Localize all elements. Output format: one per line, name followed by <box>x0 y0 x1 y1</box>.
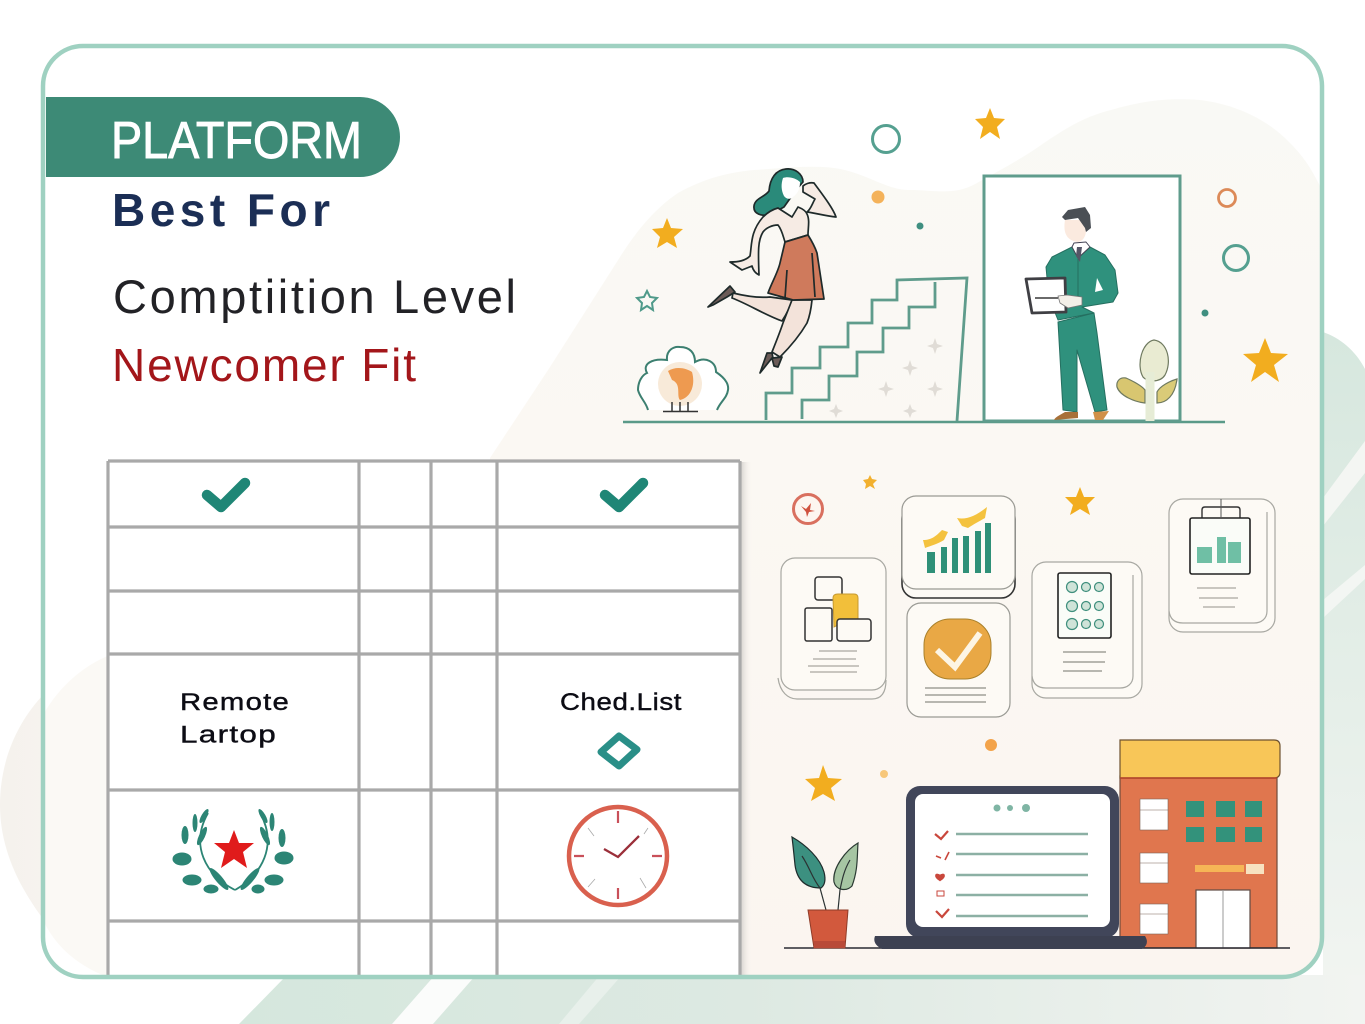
text: Newcomer Fit: Newcomer Fit <box>112 339 416 391</box>
plant pot <box>792 837 858 948</box>
icon: check mark right <box>605 483 643 507</box>
ground line <box>623 421 1225 423</box>
icon: laurel with red star <box>172 808 294 894</box>
plant by door <box>1117 340 1177 421</box>
icon: red circle badge <box>794 494 822 524</box>
text: Remote Lartop <box>182 693 288 748</box>
ground line <box>784 947 1290 949</box>
building <box>1120 740 1280 948</box>
panel: feature cards <box>778 475 1275 717</box>
stars <box>863 475 1095 515</box>
banner: PLATFORM <box>46 97 400 177</box>
card: check badge <box>907 603 1010 717</box>
text: Ched.List: Ched.List <box>560 689 682 716</box>
illustration: laptop and building <box>784 739 1290 949</box>
card: blocks <box>778 558 886 699</box>
woman figure <box>708 169 836 373</box>
text: Remote Lartop: Remote <box>180 689 290 716</box>
star and dots <box>805 739 997 801</box>
bush with bird <box>638 347 728 412</box>
card: growth chart <box>902 496 1015 598</box>
heading: Best For: Best For <box>112 184 330 236</box>
text: Comptiition Level: Comptiition Level <box>113 270 516 323</box>
icon: clock <box>569 807 667 905</box>
illustration: stairs scene <box>623 169 1225 422</box>
text: Remote Lartop: Lartop <box>180 722 277 748</box>
sparkles on stairs <box>829 338 943 418</box>
decorative stars and dots: top <box>637 108 1288 382</box>
banner: PLATFORM: PLATFORM <box>111 112 362 170</box>
staircase <box>766 278 967 421</box>
card: clipboard chart <box>1169 499 1275 632</box>
icon: check mark left <box>207 483 245 507</box>
icon: diamond <box>601 736 637 766</box>
card: tablet grid <box>1032 562 1142 698</box>
door <box>984 176 1180 421</box>
man figure <box>1026 207 1118 420</box>
laptop <box>874 786 1147 949</box>
table <box>108 461 752 981</box>
